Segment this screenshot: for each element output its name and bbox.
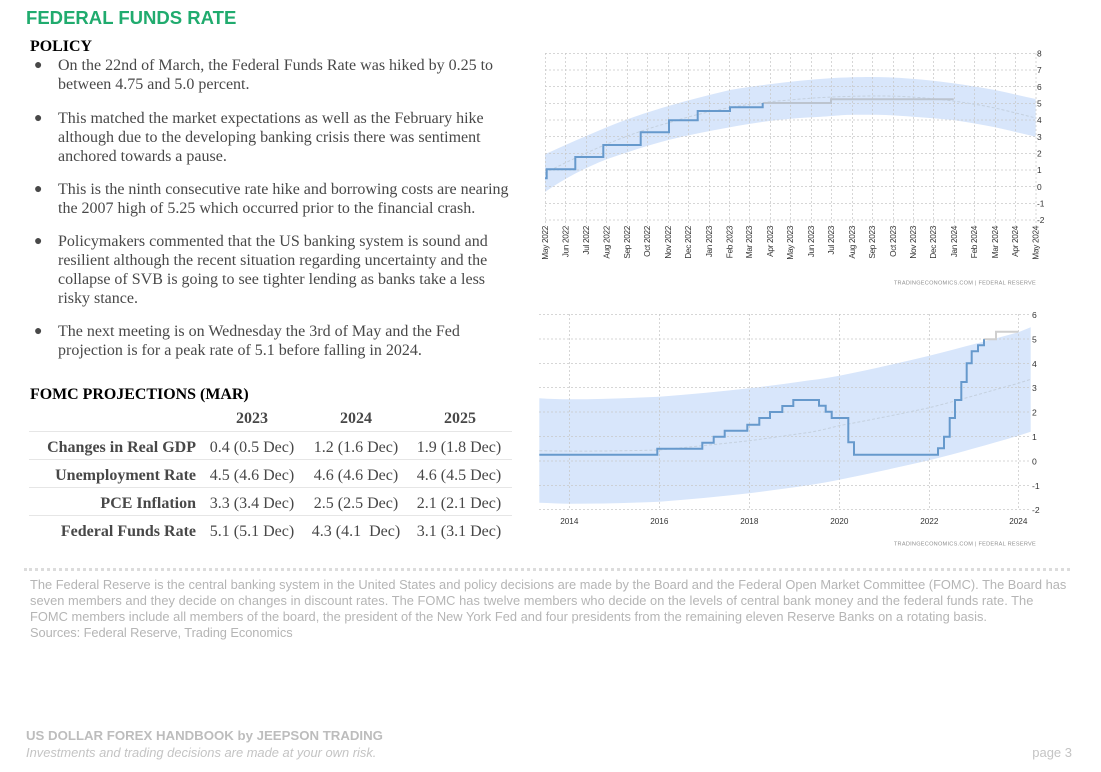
x axis month labels: May 2023 bbox=[786, 225, 795, 260]
bullet 3: the 2007 high of 5.25 which occurred prior to the financial crash. bbox=[58, 200, 475, 217]
table header row bbox=[236, 410, 476, 427]
x axis month labels: Jun 2023 bbox=[807, 225, 816, 257]
y axis labels: 4 bbox=[1037, 115, 1042, 125]
x axis month labels: Dec 2023 bbox=[929, 225, 938, 259]
bullet 4: resilient although the recent situation regarding uncertainty and the bbox=[58, 252, 487, 269]
y axis labels: 5 bbox=[1037, 98, 1042, 108]
bullet 3: This is the ninth consecutive rate hike and borrowing costs are nearing bbox=[58, 181, 508, 198]
y axis labels: 3 bbox=[1032, 383, 1037, 393]
table row: federal funds rate: 4.3 (4.1 Dec) bbox=[312, 523, 400, 540]
actual rate steps bbox=[545, 103, 763, 178]
table row: real GDP: 0.4 (0.5 Dec) bbox=[210, 439, 294, 456]
bullet 4: collapse of SVB is going to see tighter lending as banks take a less bbox=[58, 271, 485, 288]
x axis month labels: Sep 2022 bbox=[623, 225, 632, 259]
table row: unemployment: 4.6 (4.6 Dec) bbox=[314, 467, 398, 484]
x axis month labels: Mar 2024 bbox=[991, 225, 1000, 258]
x axis month labels: Mar 2023 bbox=[745, 225, 754, 258]
heading: FOMC projections: FOMC PROJECTIONS (MAR) bbox=[30, 386, 249, 403]
y axis labels: 4 bbox=[1032, 359, 1037, 369]
y axis labels: 0 bbox=[1037, 182, 1042, 192]
chart: federal funds rate forecast May 2022 to May 2024 bbox=[541, 48, 1045, 286]
table: FOMC projections bbox=[29, 410, 512, 540]
y axis labels: 2 bbox=[1037, 148, 1042, 158]
bullet 2 bbox=[34, 110, 484, 165]
x axis month labels: Apr 2023 bbox=[766, 225, 775, 257]
x axis month labels: Nov 2023 bbox=[909, 225, 918, 259]
text block: Federal Reserve explanation and sources bbox=[30, 577, 1066, 640]
table row: unemployment: 4.6 (4.5 Dec) bbox=[417, 467, 501, 484]
dotted divider bbox=[24, 568, 1070, 571]
bullet 1: On the 22nd of March, the Federal Funds Rate was hiked by 0.25 to bbox=[58, 57, 493, 74]
bullet 5: ● bbox=[34, 324, 42, 339]
y axis labels bbox=[1032, 310, 1040, 515]
forecast midline bbox=[539, 379, 1031, 451]
x axis year labels bbox=[560, 517, 1028, 526]
table row: real GDP bbox=[47, 439, 501, 456]
x axis year labels: 2014 bbox=[560, 517, 579, 526]
chart: federal funds rate history 2014 to 2024 bbox=[539, 310, 1040, 548]
x axis month labels: Jun 2022 bbox=[562, 225, 570, 257]
x axis month labels: Sep 2023 bbox=[868, 225, 877, 259]
x axis month labels: Jan 2024 bbox=[950, 225, 959, 257]
bullet 2: This matched the market expectations as well as the February hike bbox=[58, 110, 484, 127]
y axis labels: 8 bbox=[1037, 48, 1042, 58]
x axis year labels: 2022 bbox=[920, 517, 939, 526]
y axis labels: -2 bbox=[1037, 215, 1045, 225]
table row: real GDP: 1.9 (1.8 Dec) bbox=[417, 439, 501, 456]
x axis month labels bbox=[541, 225, 1040, 260]
x axis month labels: May 2024 bbox=[1032, 225, 1040, 260]
y axis labels: -1 bbox=[1037, 198, 1045, 208]
bullet 2: ● bbox=[34, 111, 42, 126]
bullet 1: ● bbox=[34, 58, 42, 73]
text block: Federal Reserve explanation and sources: Sources: Federal Reserve, Trading Economics bbox=[30, 625, 293, 640]
actual rate steps bbox=[539, 339, 984, 455]
x axis month labels: Oct 2022 bbox=[643, 225, 652, 257]
table row: real GDP: 1.2 (1.6 Dec) bbox=[314, 439, 398, 456]
x axis year labels: 2024 bbox=[1009, 517, 1028, 526]
table row: real GDP: Changes in Real GDP bbox=[47, 439, 196, 456]
x axis month labels: Aug 2023 bbox=[848, 225, 857, 259]
y axis labels: -2 bbox=[1032, 505, 1040, 515]
bullet 4: risky stance. bbox=[58, 290, 138, 307]
table row: PCE inflation: 2.1 (2.1 Dec) bbox=[417, 495, 501, 512]
table row: unemployment: 4.5 (4.6 Dec) bbox=[210, 467, 294, 484]
x axis month labels: Jul 2022 bbox=[582, 225, 591, 255]
table header row: 2025 bbox=[444, 410, 476, 427]
table row: PCE inflation: PCE Inflation bbox=[100, 495, 196, 512]
x axis month labels: Dec 2022 bbox=[684, 225, 693, 259]
y axis labels: 6 bbox=[1037, 82, 1042, 92]
chart source: TRADINGECONOMICS.COM | FEDERAL RESERVE bbox=[894, 280, 1036, 286]
table row: federal funds rate: 3.1 (3.1 Dec) bbox=[417, 523, 501, 540]
x axis year labels: 2020 bbox=[830, 517, 849, 526]
table row: PCE inflation: 2.5 (2.5 Dec) bbox=[314, 495, 398, 512]
bullet 4: ● bbox=[34, 234, 42, 249]
y axis labels: 1 bbox=[1037, 165, 1042, 175]
table row: federal funds rate: Federal Funds Rate bbox=[61, 523, 196, 540]
bullet 3 bbox=[34, 181, 508, 217]
y axis labels: 5 bbox=[1032, 334, 1037, 344]
table row: federal funds rate bbox=[61, 523, 501, 540]
x axis year labels: 2016 bbox=[650, 517, 669, 526]
forecast rate steps bbox=[763, 99, 954, 103]
x axis month labels: Feb 2024 bbox=[970, 225, 979, 258]
x axis month labels: Feb 2023 bbox=[726, 225, 734, 258]
bullet 2: although due to the developing banking crisis there was sentiment bbox=[58, 129, 481, 146]
table row: PCE inflation: 3.3 (3.4 Dec) bbox=[210, 495, 294, 512]
text block: Federal Reserve explanation and sources: seven members and they decide on changes in discount rates. The FOMC has twelve members who decide on the levels of central bank money and the federal funds rate. The bbox=[30, 593, 1033, 608]
table row: unemployment: Unemployment Rate bbox=[55, 467, 196, 484]
heading: policy: POLICY bbox=[30, 38, 92, 55]
y axis labels bbox=[1037, 48, 1045, 225]
bullet 5: projection is for a peak rate of 5.1 before falling in 2024. bbox=[58, 342, 422, 359]
table header row: 2024 bbox=[340, 410, 372, 427]
chart source: TRADINGECONOMICS.COM | FEDERAL RESERVE bbox=[894, 542, 1036, 548]
y axis labels: 1 bbox=[1032, 432, 1037, 442]
x axis month labels: Aug 2022 bbox=[602, 225, 612, 259]
footer: handbook title: US DOLLAR FOREX HANDBOOK by JEEPSON TRADING bbox=[26, 728, 383, 743]
footer: disclaimer: Investments and trading decisions are made at your own risk. bbox=[26, 745, 376, 760]
x axis year labels: 2018 bbox=[740, 517, 759, 526]
y axis labels: 6 bbox=[1032, 310, 1037, 320]
table header row: 2023 bbox=[236, 410, 268, 427]
forecast band bbox=[539, 327, 1031, 504]
x axis month labels: Jan 2023 bbox=[705, 225, 714, 257]
y axis labels: 0 bbox=[1032, 456, 1037, 466]
y axis labels: 3 bbox=[1037, 132, 1042, 142]
table row: unemployment bbox=[55, 467, 501, 484]
y axis labels: 7 bbox=[1037, 65, 1042, 75]
y axis labels: -1 bbox=[1032, 481, 1040, 491]
title: FEDERAL FUNDS RATE bbox=[26, 7, 236, 28]
x axis month labels: Jul 2023 bbox=[827, 225, 836, 255]
bullet 5: The next meeting is on Wednesday the 3rd of May and the Fed bbox=[58, 323, 460, 340]
bullet 5 bbox=[34, 323, 460, 359]
table row: federal funds rate: 5.1 (5.1 Dec) bbox=[210, 523, 294, 540]
bullet 4: Policymakers commented that the US banking system is sound and bbox=[58, 233, 488, 250]
x axis month labels: Nov 2022 bbox=[664, 225, 673, 259]
bullet 4 bbox=[34, 233, 488, 307]
x axis month labels: May 2022 bbox=[541, 225, 550, 260]
text block: Federal Reserve explanation and sources: FOMC members include all members of the board, the president of the New York Fed and four presidents from the remaining eleven Reserve Banks on a rotating basis. bbox=[30, 609, 987, 624]
x axis month labels: Oct 2023 bbox=[889, 225, 898, 257]
footer: page number: page 3 bbox=[1032, 745, 1072, 760]
forecast band bbox=[545, 77, 1036, 192]
x axis month labels: Apr 2024 bbox=[1011, 225, 1020, 257]
text block: policy bullets bbox=[34, 57, 508, 359]
bullet 2: anchored towards a pause. bbox=[58, 148, 227, 165]
forecast rate steps bbox=[984, 332, 1018, 339]
y axis labels: 2 bbox=[1032, 408, 1037, 418]
forecast midline bbox=[545, 96, 1036, 173]
text block: Federal Reserve explanation and sources: The Federal Reserve is the central banking system in the United States and policy decisions are made by the Board and the Federal Open Market Committee (FOMC). The Board has bbox=[30, 577, 1066, 592]
bullet 1 bbox=[34, 57, 493, 93]
bullet 1: between 4.75 and 5.0 percent. bbox=[58, 76, 249, 93]
bullet 3: ● bbox=[34, 182, 42, 197]
table row: PCE inflation bbox=[100, 495, 501, 512]
